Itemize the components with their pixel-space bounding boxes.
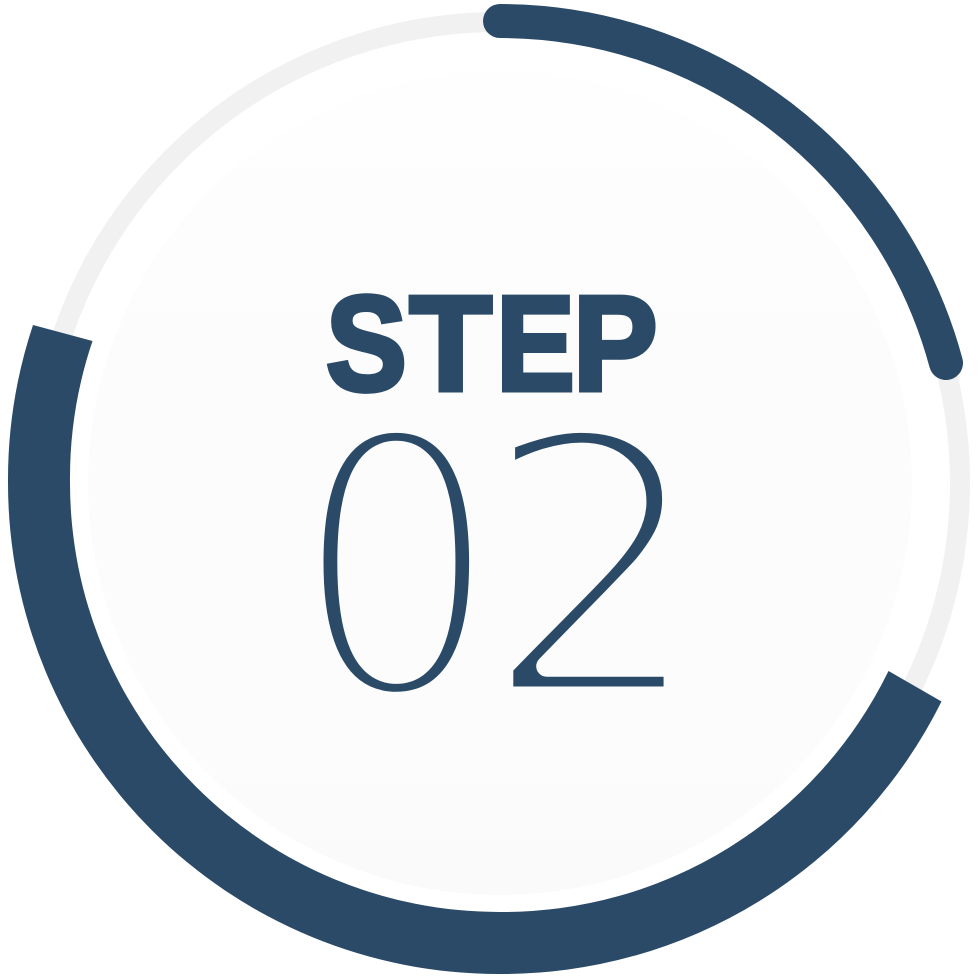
heading: STEP: S [326,269,407,419]
number: 02 [293,355,711,785]
heading: STEP: E [496,267,575,419]
heading: STEP [326,267,658,419]
heading: STEP: T [410,268,492,419]
number: 02: 2 [476,355,711,785]
inner disc [88,71,912,895]
thick progress arc [8,325,942,974]
number: 02: 0 [293,355,500,785]
heading: STEP: P [573,267,658,419]
thin progress arc [500,21,946,363]
